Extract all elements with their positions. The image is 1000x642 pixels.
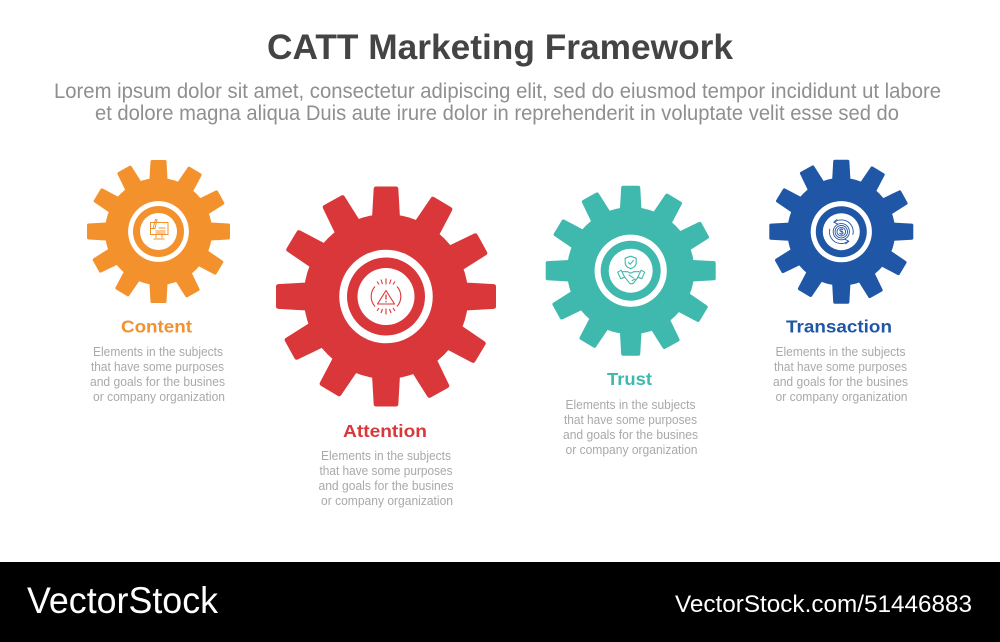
description: content bbox=[90, 345, 225, 404]
description: attention: and goals for the busines bbox=[318, 479, 454, 493]
description: transaction: and goals for the busines bbox=[773, 375, 908, 389]
description: content: that have some purposes bbox=[91, 360, 224, 374]
label: transaction: Transaction bbox=[786, 316, 892, 336]
footer band bbox=[0, 562, 1000, 642]
icon: dollar coin cycle: $ bbox=[839, 227, 844, 236]
description: attention: that have some purposes bbox=[320, 464, 452, 478]
description: content: and goals for the busines bbox=[90, 375, 225, 389]
footer logo: VectorStock bbox=[27, 580, 218, 621]
subtitle: Lorem ipsum dolor sit amet, consectetur adipiscing elit, sed do eiusmod tempor incididunt ut labore bbox=[54, 80, 941, 103]
icon: warning triangle bbox=[371, 278, 401, 314]
description: transaction bbox=[773, 345, 908, 404]
description: attention bbox=[318, 449, 454, 508]
gear: content bbox=[60, 133, 257, 330]
description: trust bbox=[563, 398, 698, 457]
gear: transaction bbox=[743, 133, 940, 330]
description: transaction: that have some purposes bbox=[774, 360, 907, 374]
label: content: Content bbox=[121, 316, 192, 336]
description: transaction: Elements in the subjects bbox=[776, 345, 906, 359]
description: trust: and goals for the busines bbox=[563, 428, 698, 442]
subtitle bbox=[54, 80, 941, 125]
footer url: VectorStock.com/51446883 bbox=[675, 591, 972, 618]
description: trust: or company organization bbox=[566, 443, 698, 457]
description: attention: or company organization bbox=[321, 494, 453, 508]
icon: handshake with shield bbox=[618, 256, 645, 284]
gear: trust bbox=[514, 154, 747, 387]
panel: attention bbox=[235, 146, 537, 508]
description: content: Elements in the subjects bbox=[93, 345, 223, 359]
description: content: or company organization bbox=[93, 390, 225, 404]
gear: attention bbox=[235, 146, 537, 447]
panel: content bbox=[60, 133, 257, 404]
description: transaction: or company organization bbox=[776, 390, 908, 404]
title: CATT Marketing Framework bbox=[267, 28, 734, 67]
panel: trust bbox=[514, 154, 747, 457]
description: trust: that have some purposes bbox=[564, 413, 697, 427]
panel: transaction bbox=[743, 133, 940, 404]
icon: dollar coin cycle bbox=[829, 219, 853, 244]
description: trust: Elements in the subjects bbox=[566, 398, 696, 412]
icon: computer with pen bbox=[150, 220, 168, 239]
label: trust: Trust bbox=[607, 369, 652, 389]
description: attention: Elements in the subjects bbox=[321, 449, 451, 463]
label: attention: Attention bbox=[343, 421, 427, 441]
subtitle: et dolore magna aliqua Duis aute irure dolor in reprehenderit in voluptate velit esse sed do bbox=[95, 102, 899, 125]
